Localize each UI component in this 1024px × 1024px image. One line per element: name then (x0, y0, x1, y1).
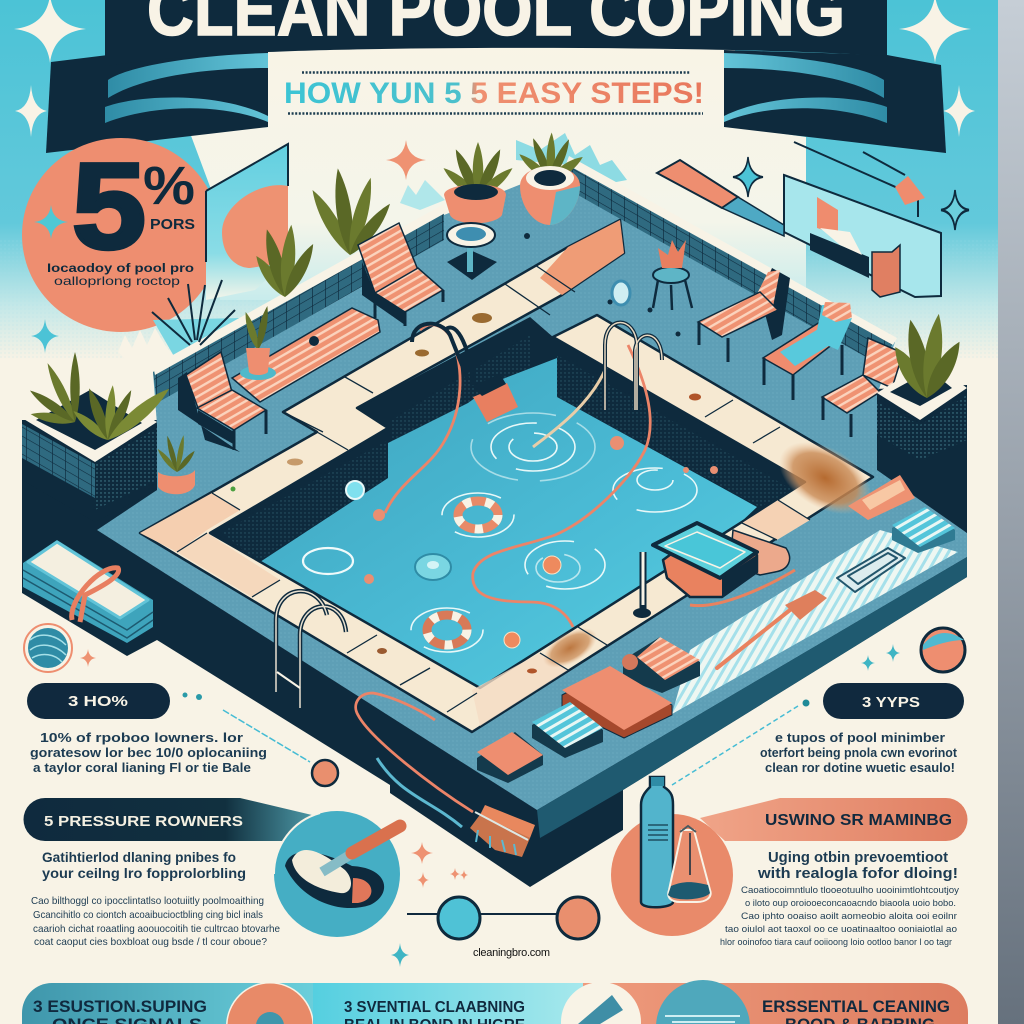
potted plants top (440, 132, 692, 336)
bench pot (240, 348, 276, 380)
pool inner dark walls (210, 317, 805, 688)
description: goratesow lor bec 10/0 oplocaniing (30, 745, 267, 760)
rust stains (230, 313, 883, 676)
header band (700, 798, 968, 841)
bench pot plant (242, 305, 271, 351)
chair right 1 (698, 268, 790, 362)
pill: 3 HO% (68, 693, 128, 710)
towel teal top (892, 507, 955, 553)
wash basin (653, 523, 795, 606)
right planter (877, 313, 967, 533)
right wall panel and tools (657, 142, 941, 297)
description: e tupos of pool minimber (775, 730, 945, 745)
paragraph: Caoatiocoimntlulo tlooeotuulho uooinimtlohtcoutjoy (741, 885, 959, 896)
background zigzag (118, 133, 627, 372)
stat circle: PORS (150, 216, 195, 233)
back walls (153, 156, 897, 403)
ladder left (276, 591, 346, 708)
stat circle: Iocaodoy of pool pro (47, 261, 194, 275)
description (760, 730, 958, 775)
deck specks (524, 233, 680, 336)
title banner (46, 0, 946, 153)
subheading: Uging otbin prevoemtioot (768, 849, 948, 866)
subheading: your ceilng lro fopprolorbling (42, 865, 246, 881)
ladder right (605, 322, 662, 410)
icon: scrubber circle (274, 811, 400, 937)
paragraph: hlor ooinofoo tiara cauf ooiioong loio ootloo banor l oo tagr (720, 937, 952, 948)
clip (837, 548, 905, 592)
dark base and sides (22, 385, 967, 887)
front mat and accessories (377, 475, 958, 857)
water circle (656, 980, 750, 1024)
card center (313, 983, 583, 1024)
small deck ring (612, 281, 630, 305)
small potted plant (156, 435, 197, 494)
pot 2 (520, 166, 580, 225)
chairs right (698, 268, 903, 437)
spiky line plant (152, 280, 235, 345)
lifebuoys (427, 501, 498, 645)
card center: 3 SVENTIAL CLAABNING (344, 999, 525, 1016)
panel: left stat (27, 683, 267, 775)
roller tool (657, 160, 738, 208)
subheading (757, 849, 958, 882)
pot 1 (444, 184, 506, 223)
panel: right step (700, 798, 968, 948)
connector balls (407, 897, 599, 939)
pool post (633, 552, 651, 618)
paragraph (720, 885, 959, 948)
coral ring (226, 982, 314, 1024)
water rings (303, 481, 451, 580)
side table (447, 223, 497, 280)
brush circle (561, 982, 641, 1024)
chair top (358, 223, 443, 326)
description: clean ror dotine wuetic esaulo! (765, 760, 955, 775)
scrub brush (377, 758, 535, 857)
description: 10% of rpoboo lowners. lor (40, 730, 243, 745)
stat circle: % (143, 156, 195, 216)
pill (27, 683, 170, 719)
towel D (622, 637, 700, 693)
paragraph: coat caoput cies boxbloat oug bsde / tl cour oboue? (34, 936, 267, 948)
paragraph: Gcancihitlo co ciontch acoaibucioctbling cing bicl inals (33, 909, 263, 921)
towel C (562, 666, 672, 738)
plant on pot 1 (440, 142, 516, 201)
header band: USWINO SR MAMINBG (765, 812, 952, 829)
stat circle: 5 (72, 138, 146, 274)
plant left planter (27, 352, 80, 427)
wall left (153, 208, 444, 403)
scraper (717, 590, 827, 668)
spray bottle (872, 245, 900, 297)
description: a taylor coral lianing Fl or tie Bale (33, 760, 251, 775)
dashed connector left (182, 692, 338, 786)
deck surface (97, 165, 967, 810)
block seams (177, 265, 810, 712)
dark band (810, 233, 869, 278)
description (30, 730, 267, 775)
stat circle (22, 138, 220, 332)
flask (668, 826, 711, 902)
ribbon tail right (724, 50, 946, 153)
stat circle: oalloprlong roctop (54, 274, 180, 288)
ripples (411, 413, 697, 652)
strap (72, 568, 119, 622)
paragraph: o iloto oup oroiooeconcaoacndo biaoola uoio bobo. (745, 898, 956, 909)
plants behind (152, 167, 395, 345)
panel: left step (24, 798, 312, 948)
swimming pool (140, 220, 883, 812)
pole (533, 368, 606, 447)
striped mat (672, 530, 958, 714)
coping tints (140, 220, 810, 726)
card right (561, 980, 968, 1024)
paragraph (31, 895, 280, 948)
plant right (888, 313, 967, 402)
chair left (178, 352, 266, 452)
card left: 3 ESUSTION.SUPING (33, 997, 207, 1016)
plant left mid (252, 224, 319, 300)
ladder top (412, 324, 474, 385)
ribbon tail left (46, 50, 268, 153)
skimmer net (472, 374, 518, 422)
ribbon main (105, 0, 887, 56)
chair right 2 (763, 302, 852, 400)
bottom cards (22, 980, 968, 1024)
subtitle: HOW YUN 5 5 EASY STEPS! (284, 77, 704, 110)
swatch right (921, 628, 965, 672)
source URL: cleaningbro.com (473, 947, 550, 959)
card right: ERSSENTIAL CEANING (762, 997, 950, 1016)
towel B (532, 702, 603, 758)
panel: right stat (760, 683, 964, 775)
header band (24, 798, 312, 841)
towel stack left (23, 540, 153, 643)
dashed connector right (672, 700, 810, 785)
frame lines (794, 142, 918, 217)
plant tall (307, 167, 395, 259)
icon: bottle and flask (611, 777, 733, 936)
coral patches (817, 197, 838, 235)
floating balls (364, 436, 718, 648)
paragraph: Cao bilthoggl co ipocclintatlso lootuiitly poolmoaithing (31, 895, 264, 907)
frame (784, 175, 941, 297)
header band: 5 PRESSURE ROWNERS (44, 813, 243, 830)
folded coral (848, 475, 915, 520)
subheading: Gatihtierlod dlaning pnibes fo (42, 849, 236, 865)
coping ring (140, 220, 873, 732)
description: oterfort being pnola cwn evorinot (760, 745, 958, 760)
pool deck base (22, 165, 967, 887)
bottle (641, 777, 673, 907)
stool with plant (653, 240, 692, 310)
subheading (42, 849, 246, 881)
left planter (22, 352, 174, 522)
sign board (206, 144, 288, 300)
paragraph: Cao iphto ooaiso aoilt aomeobio aloita ooi eoilnr (741, 911, 957, 922)
paragraph: caarioh cichat roaatling aoouocoitih tie cultrcao btovarhe (33, 923, 280, 935)
chair right 3 (822, 338, 903, 437)
bench (232, 305, 380, 402)
paragraph: tao oiulol aot taoxol oo ce uoatinaaltoo ooniaiotlal ao (725, 924, 957, 935)
hoses (356, 325, 650, 812)
front deck lip (537, 557, 967, 838)
plant on pot 2 (517, 132, 585, 184)
wall right (569, 160, 895, 365)
subheading: with realogla fofor dloing! (757, 865, 958, 882)
water (260, 358, 757, 688)
ribbon folds (105, 53, 887, 123)
swatch left (24, 624, 72, 672)
pill: 3 YYPS (862, 694, 920, 711)
towel A (477, 732, 543, 783)
pill (823, 683, 964, 719)
card left (22, 982, 320, 1024)
